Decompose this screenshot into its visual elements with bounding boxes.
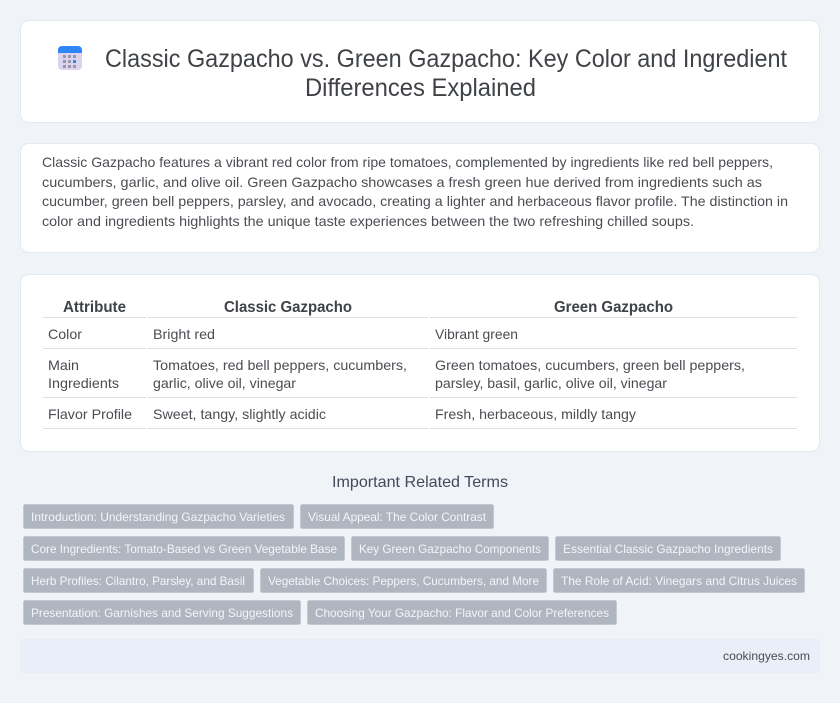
tag xyxy=(352,536,548,560)
table header: Attribute xyxy=(63,299,126,316)
table row: color: Vibrant green xyxy=(435,326,518,342)
table row: main ingredients xyxy=(48,357,745,391)
tag: Visual Appeal: The Color Contrast xyxy=(308,510,487,524)
table row: flavor profile: Fresh, herbaceous, mildly tangy xyxy=(435,406,636,422)
tag: Presentation: Garnishes and Serving Suggestions xyxy=(31,606,293,620)
table row: main ingredients: parsley, basil, garlic, olive oil, vinegar xyxy=(435,375,667,391)
tag: Essential Classic Gazpacho Ingredients xyxy=(563,542,773,556)
table row: main ingredients: Main xyxy=(48,357,79,373)
text block: description: cucumber, green bell peppers, parsley, and avocado, creating a lighter and herbaceous flavor profile. The distinction in xyxy=(42,193,788,209)
table header xyxy=(63,299,673,316)
table row: flavor profile: Flavor Profile xyxy=(48,406,132,422)
panel: description xyxy=(20,144,820,252)
tag xyxy=(556,536,780,560)
panel: comparison table xyxy=(20,274,820,452)
tag xyxy=(24,536,344,560)
tag: Choosing Your Gazpacho: Flavor and Color Preferences xyxy=(315,606,609,620)
tag: Herb Profiles: Cilantro, Parsley, and Basil xyxy=(31,574,245,588)
icon: calendar xyxy=(58,46,82,70)
text block: description: Classic Gazpacho features a vibrant red color from ripe tomatoes, complemented by ingredients like red bell peppers, xyxy=(42,154,773,170)
table row: color: Color xyxy=(48,326,82,342)
table row: main ingredients: Ingredients xyxy=(48,375,119,391)
tag xyxy=(300,504,494,528)
tag xyxy=(260,568,546,592)
tag: Key Green Gazpacho Components xyxy=(359,542,541,556)
table row: flavor profile xyxy=(48,406,636,422)
tag list xyxy=(24,504,804,624)
table header: Classic Gazpacho xyxy=(224,299,352,316)
heading: important related terms: Important Related Terms xyxy=(332,474,508,491)
panel: title header xyxy=(20,20,820,122)
tag xyxy=(24,568,254,592)
table header: Green Gazpacho xyxy=(554,299,673,316)
text block: description: cucumbers, garlic, and olive oil. Green Gazpacho showcases a fresh green hue derived from ingredients such as xyxy=(42,174,762,190)
tag: The Role of Acid: Vinegars and Citrus Juices xyxy=(561,574,797,588)
tag: Introduction: Understanding Gazpacho Varieties xyxy=(31,510,285,524)
table row: main ingredients: garlic, olive oil, vinegar xyxy=(153,375,296,391)
tag xyxy=(24,600,300,624)
title xyxy=(105,45,787,102)
tag xyxy=(24,504,294,528)
text block: description xyxy=(42,154,788,229)
footer xyxy=(20,639,820,673)
tag xyxy=(308,600,616,624)
table row: flavor profile: Sweet, tangy, slightly acidic xyxy=(153,406,326,422)
tag: Core Ingredients: Tomato-Based vs Green Vegetable Base xyxy=(31,542,337,556)
table row: main ingredients: Green tomatoes, cucumbers, green bell peppers, xyxy=(435,357,745,373)
tag xyxy=(554,568,804,592)
table row: color: Bright red xyxy=(153,326,215,342)
text block: description: color and ingredients highlights the unique taste experiences between the two refreshing chilled soups. xyxy=(42,213,694,229)
table row: color xyxy=(48,326,518,342)
title: Classic Gazpacho vs. Green Gazpacho: Key Color and Ingredient xyxy=(105,45,787,73)
footer source: cookingyes.com xyxy=(723,649,810,663)
title: Differences Explained xyxy=(305,74,536,102)
table row: main ingredients: Tomatoes, red bell peppers, cucumbers, xyxy=(153,357,407,373)
tag: Vegetable Choices: Peppers, Cucumbers, and More xyxy=(268,574,539,588)
